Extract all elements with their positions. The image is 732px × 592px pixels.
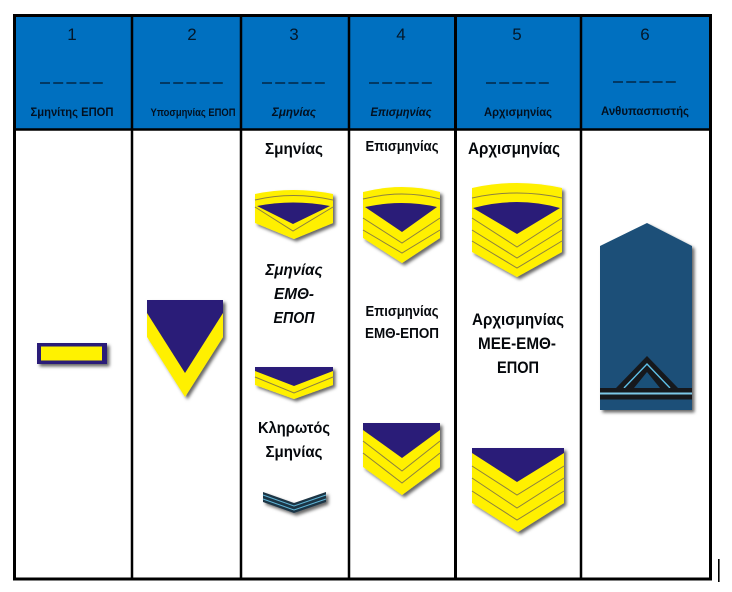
header: column 2: Υποσμηνίας ΕΠΟΠ xyxy=(150,107,236,119)
icon: Επισμηνίας ΕΜΘ-ΕΠΟΠ insignia xyxy=(363,423,440,495)
header: column 4 xyxy=(369,25,434,119)
label: Επισμηνίας: Επισμηνίας xyxy=(366,139,438,155)
icon: Αρχισμηνίας ΜΕΕ-ΕΜΘ-ΕΠΟΠ insignia xyxy=(472,448,564,532)
icon: single chevron, Υποσμηνίας ΕΠΟΠ xyxy=(147,300,223,397)
icon: Επισμηνίας insignia xyxy=(363,187,440,263)
icon: Αρχισμηνίας insignia xyxy=(472,183,562,277)
label: Αρχισμηνίας: Αρχισμηνίας xyxy=(468,140,560,158)
header: column 1: Σμηνίτης ΕΠΟΠ xyxy=(30,105,114,119)
label: Αρχισμηνίας ΜΕΕ-ΕΜΘ-ΕΠΟΠ: ΜΕΕ-ΕΜΘ- xyxy=(478,335,556,353)
label: Αρχισμηνίας ΜΕΕ-ΕΜΘ-ΕΠΟΠ: ΕΠΟΠ xyxy=(497,359,539,377)
header: column 1 xyxy=(30,25,114,119)
stray vertical mark xyxy=(718,559,720,582)
label: Επισμηνίας ΕΜΘ-ΕΠΟΠ: ΕΜΘ-ΕΠΟΠ xyxy=(365,326,439,342)
header: column 3 xyxy=(262,25,327,119)
header: column 6 xyxy=(601,25,689,118)
label: Κληρωτός Σμηνίας: Κληρωτός xyxy=(258,420,330,437)
label: Επισμηνίας ΕΜΘ-ΕΠΟΠ xyxy=(365,304,439,342)
icon: Σμηνίας insignia xyxy=(255,190,333,239)
label: Σμηνίας ΕΜΘ-ΕΠΟΠ: ΕΜΘ- xyxy=(274,286,314,303)
header: column 1: 1 xyxy=(67,25,77,44)
icon: shoulder board, Ανθυπασπιστής xyxy=(600,223,692,410)
label: Σμηνίας ΕΜΘ-ΕΠΟΠ: ΕΠΟΠ xyxy=(274,310,315,327)
header: column 3: 3 xyxy=(289,25,299,44)
header: column 4: Επισμηνίας xyxy=(370,105,432,119)
label: Σμηνίας: Σμηνίας xyxy=(265,141,323,158)
icon: rank bar, Σμηνίτης ΕΠΟΠ xyxy=(37,343,107,364)
header: column 2 xyxy=(150,25,236,119)
label: Σμηνίας ΕΜΘ-ΕΠΟΠ xyxy=(265,262,323,327)
header: column 5: Αρχισμηνίας xyxy=(484,105,552,119)
icon: Σμηνίας ΕΜΘ-ΕΠΟΠ insignia xyxy=(255,367,333,399)
label: Αρχισμηνίας ΜΕΕ-ΕΜΘ-ΕΠΟΠ xyxy=(472,311,564,377)
header: column 4: 4 xyxy=(396,25,406,44)
header: column 6: 6 xyxy=(640,25,650,44)
icon: Κληρωτός Σμηνίας insignia xyxy=(263,492,326,513)
header: column 3: Σμηνίας xyxy=(271,105,317,119)
label: Αρχισμηνίας ΜΕΕ-ΕΜΘ-ΕΠΟΠ: Αρχισμηνίας xyxy=(472,311,564,329)
header: column 5: 5 xyxy=(512,25,522,44)
label: Κληρωτός Σμηνίας: Σμηνίας xyxy=(266,444,322,461)
header: column 2: 2 xyxy=(187,25,197,44)
label: Κληρωτός Σμηνίας xyxy=(258,420,330,461)
header: column 5 xyxy=(484,25,552,119)
header: column 6: Ανθυπασπιστής xyxy=(601,104,689,118)
label: Σμηνίας ΕΜΘ-ΕΠΟΠ: Σμηνίας xyxy=(265,262,323,279)
label: Επισμηνίας ΕΜΘ-ΕΠΟΠ: Επισμηνίας xyxy=(366,304,438,320)
